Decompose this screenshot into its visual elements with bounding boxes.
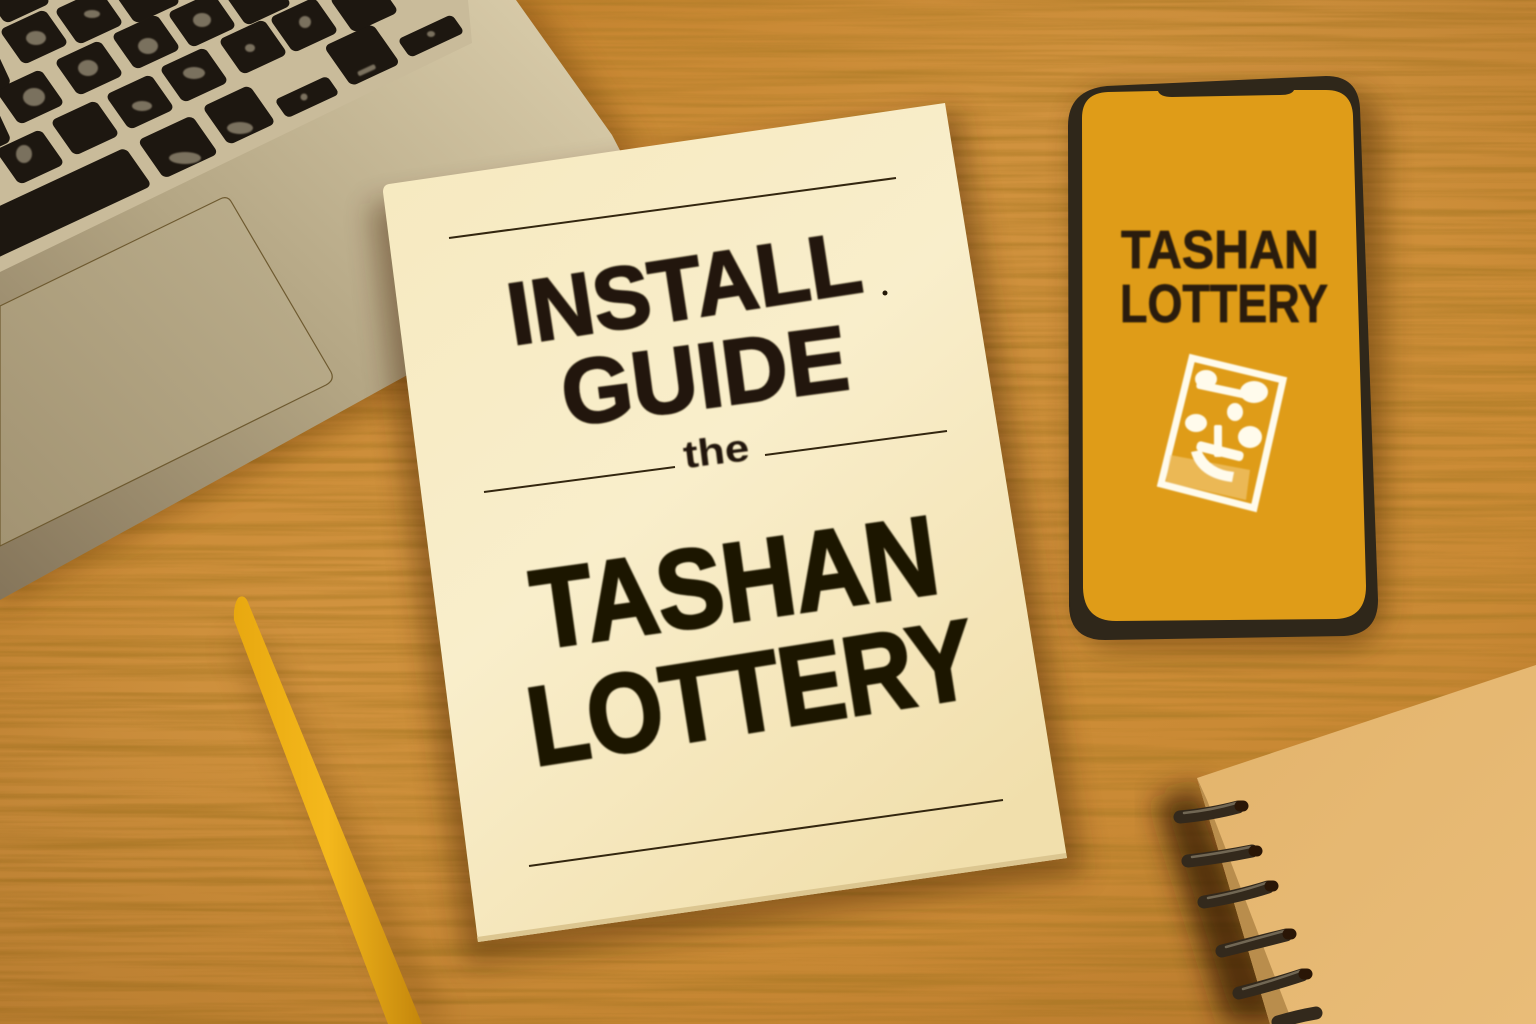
heading: tashan lottery	[519, 492, 983, 790]
phone	[1068, 76, 1385, 648]
install guide booklet	[370, 103, 1085, 965]
heading: tashan lottery: TASHAN	[524, 492, 945, 673]
lottery ticket icon	[1161, 358, 1283, 508]
trackpad	[0, 198, 332, 546]
spiral binding	[1180, 803, 1316, 1022]
phone title: TASHAN	[1121, 220, 1319, 280]
keyboard recess	[0, 0, 472, 272]
heading: install guide: GUIDE	[555, 307, 854, 446]
key glyph highlights	[16, 10, 435, 164]
phone screen	[1082, 90, 1366, 621]
pencil	[225, 596, 450, 1024]
keyboard keys	[0, 0, 465, 279]
phone title: LOTTERY	[1120, 274, 1328, 334]
heading: install guide	[501, 212, 868, 446]
divider with the: the	[681, 427, 752, 477]
bottom rule	[529, 800, 1003, 866]
notebook	[1155, 665, 1536, 1024]
small mark after install	[882, 290, 888, 296]
phone title	[1120, 220, 1328, 334]
top rule	[449, 178, 896, 238]
heading: tashan lottery: LOTTERY	[519, 596, 983, 790]
heading: install guide: INSTALL	[501, 212, 868, 364]
laptop	[0, 0, 640, 606]
divider with the	[484, 427, 947, 492]
